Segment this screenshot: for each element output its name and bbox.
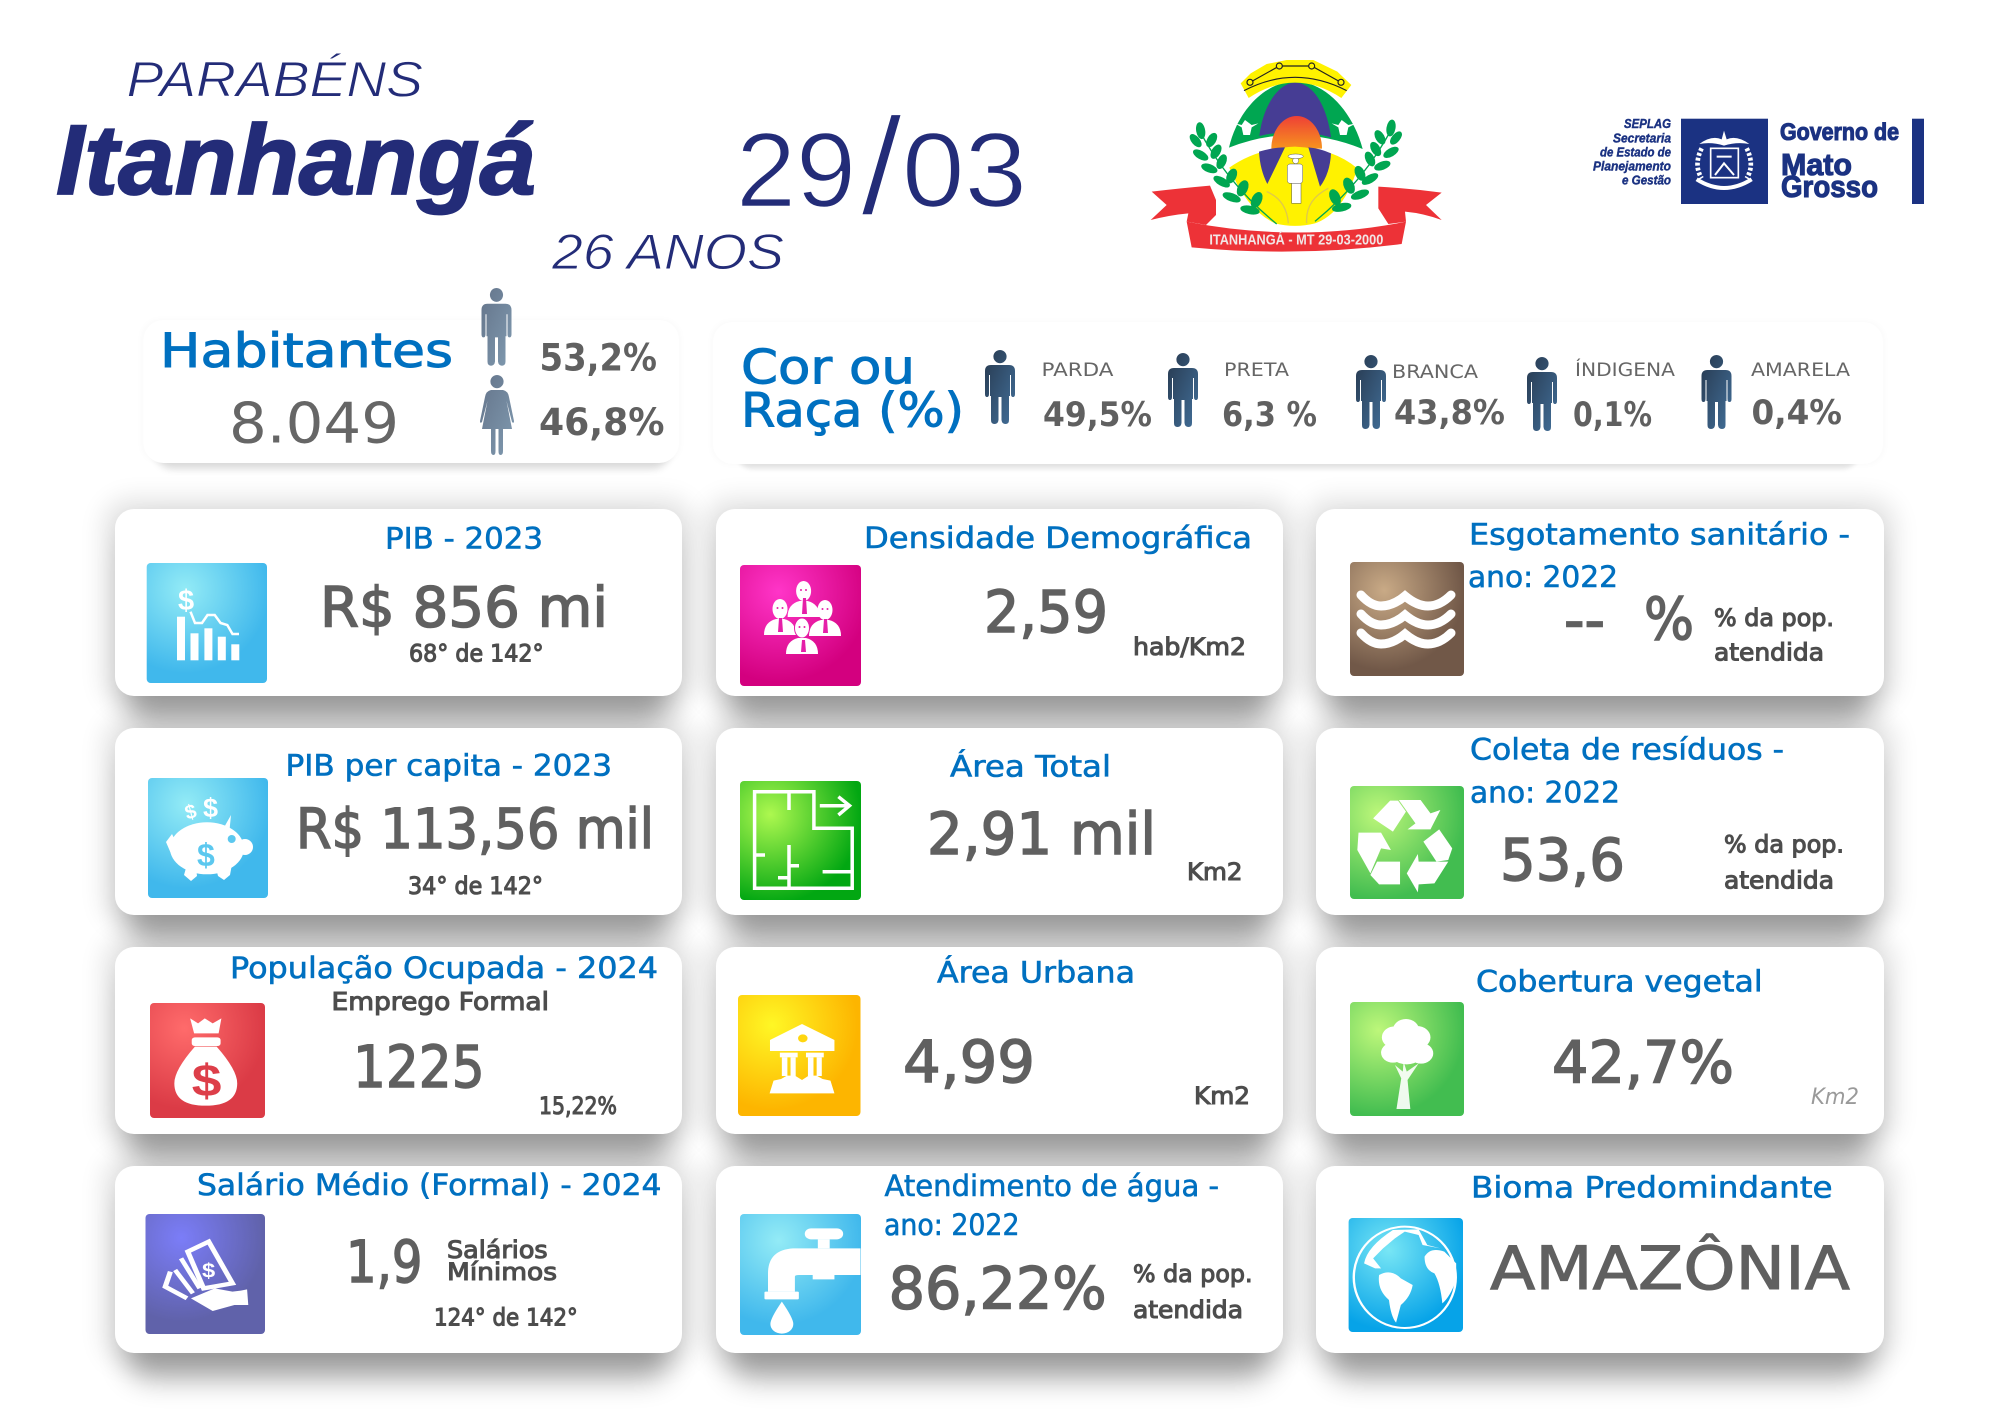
card: Cobertura vegetal xyxy=(1316,947,1884,1134)
item: Amarela xyxy=(1702,355,1850,433)
icon: state crest xyxy=(1681,119,1768,204)
card: Área Total xyxy=(716,728,1283,915)
title: Itanhangá: Itanhangá xyxy=(56,104,536,215)
icon: piggy bank xyxy=(148,778,268,898)
heading: Atendimento de água - xyxy=(884,1169,1219,1203)
item: Preta: 6,3 % xyxy=(1222,395,1317,435)
value: 86,22% xyxy=(889,1254,1107,1322)
heading: Cobertura vegetal xyxy=(1476,964,1763,998)
icon: tree xyxy=(1350,1002,1464,1116)
card: Bioma Predominante xyxy=(1316,1166,1884,1353)
icon: falling bar chart: $ xyxy=(178,585,194,617)
icon: money bag: $ xyxy=(192,1056,221,1106)
text: Grosso: Grosso xyxy=(1781,169,1878,204)
item: Indígena xyxy=(1527,357,1675,435)
panel: Cor ou Raça xyxy=(713,322,1883,464)
card: População Ocupada xyxy=(115,947,682,1134)
heading: População Ocupada - 2024 xyxy=(230,951,658,985)
icon: falling bar chart xyxy=(147,563,267,683)
value: 2,59 xyxy=(984,578,1108,646)
share: 15,22% xyxy=(539,1092,617,1120)
unit: Mínimos xyxy=(447,1258,557,1286)
value: 1,9 xyxy=(346,1228,422,1296)
heading: Área Urbana xyxy=(937,956,1135,990)
icon: floor plan xyxy=(740,781,861,900)
date: 29/03: 03 xyxy=(902,112,1027,230)
logo: municipal coat of arms xyxy=(1151,60,1442,252)
value: R$ 856 mi xyxy=(320,576,608,640)
icon: cash in hand: $ xyxy=(202,1259,215,1282)
icon: piggy bank: $ xyxy=(203,793,218,823)
value: AMAZÔNIA xyxy=(1490,1233,1850,1304)
logo: municipal coat of arms: ITANHANGÁ - MT 29-03-2000 xyxy=(1209,231,1383,248)
heading: PIB per capita - 2023 xyxy=(286,748,612,782)
shadows under panels and cards xyxy=(105,318,1894,1379)
item: Amarela: AMARELA xyxy=(1751,359,1850,381)
icon: man xyxy=(482,288,512,366)
text: Mato: Mato xyxy=(1781,147,1852,182)
item: Indígena: 0,1% xyxy=(1573,395,1652,435)
icon: group of people xyxy=(740,565,861,686)
anniversary: 26 ANOS: 26 ANOS xyxy=(551,224,784,280)
heading: Cor ou Raça: Cor ou xyxy=(741,340,915,395)
item: Indígena: ÍNDIGENA xyxy=(1575,358,1675,381)
text: SEPLAG secretariat: Secretaria xyxy=(1613,132,1671,146)
value: women percent: 46,8% xyxy=(539,401,664,444)
item: Preta xyxy=(1168,353,1317,435)
date: 29/03: / xyxy=(861,90,903,244)
heading: PIB - 2023 xyxy=(385,522,543,556)
icon: civic building xyxy=(738,995,860,1116)
icon: woman xyxy=(480,375,514,455)
item: Preta: PRETA xyxy=(1224,359,1289,381)
value: 1225 xyxy=(353,1033,485,1101)
icon: piggy bank: $ xyxy=(183,800,199,825)
text: SEPLAG secretariat xyxy=(1593,117,1671,188)
unit: Km2 xyxy=(1811,1085,1859,1110)
bar: logo edge xyxy=(1912,119,1924,204)
icon: cash in hand xyxy=(146,1214,265,1334)
item: Amarela: 0,4% xyxy=(1752,393,1842,433)
card: Esgotamento sanitário xyxy=(1316,509,1884,696)
date: 29/03 xyxy=(736,90,1027,244)
heading: Bioma Predomindante xyxy=(1471,1170,1833,1204)
heading xyxy=(884,1169,1219,1242)
heading xyxy=(1468,518,1850,594)
unit xyxy=(1724,831,1844,895)
value: 53,6 xyxy=(1500,826,1625,894)
ranking: 34° de 142° xyxy=(408,872,543,900)
item: Branca: BRANCA xyxy=(1392,361,1478,383)
heading: ano: 2022 xyxy=(1468,560,1618,594)
value: 42,7% xyxy=(1552,1028,1734,1096)
heading: Salário Médio (Formal) - 2024 xyxy=(197,1168,662,1202)
heading: Habitantes: Habitantes xyxy=(160,324,453,379)
card: Atendimento de água xyxy=(716,1166,1283,1353)
date: 29/03: 29 xyxy=(736,112,856,230)
unit: Km2 xyxy=(1187,858,1242,886)
unit: hab/Km2 xyxy=(1133,633,1246,661)
heading: Esgotamento sanitário - xyxy=(1469,518,1850,552)
heading: Densidade Demográfica xyxy=(864,521,1252,555)
value: -- xyxy=(1564,586,1605,654)
item: Branca xyxy=(1356,355,1505,433)
heading: Cor ou Raça: Raça (%) xyxy=(741,384,964,439)
unit: atendida xyxy=(1724,867,1834,895)
unit: % da pop. xyxy=(1714,604,1834,632)
item: Parda: 49,5% xyxy=(1043,395,1152,435)
heading: ano: 2022 xyxy=(884,1208,1020,1242)
heading xyxy=(1470,732,1784,810)
unit: % da pop. xyxy=(1133,1260,1252,1288)
unit xyxy=(447,1236,557,1286)
logo: SEPLAG Governo de Mato Grosso xyxy=(1593,117,1924,204)
text: SEPLAG secretariat: e Gestão xyxy=(1622,174,1671,188)
card: PIB 2023 xyxy=(115,509,682,696)
icon: money bag xyxy=(150,1003,265,1118)
unit xyxy=(1133,1260,1252,1324)
percent sign: % xyxy=(1644,585,1694,653)
ranking: 124° de 142° xyxy=(434,1304,578,1332)
heading: Área Total xyxy=(950,750,1111,784)
value: 2,91 mil xyxy=(927,800,1156,868)
icon: water tap xyxy=(740,1214,861,1335)
value: 4,99 xyxy=(903,1028,1035,1096)
value: population: 8.049 xyxy=(229,392,399,457)
panel: Habitantes xyxy=(144,288,679,463)
ranking: 68° de 142° xyxy=(409,640,544,668)
unit: atendida xyxy=(1714,639,1824,667)
item: Parda: PARDA xyxy=(1042,359,1114,381)
card: Salário Médio xyxy=(115,1166,682,1353)
unit: Km2 xyxy=(1194,1082,1250,1110)
value: R$ 113,56 mil xyxy=(296,797,654,861)
heading: Cor ou Raça xyxy=(741,340,964,439)
item: Parda xyxy=(985,350,1152,435)
icon: recycling arrows xyxy=(1350,786,1464,899)
item: Branca: 43,8% xyxy=(1394,393,1505,433)
card: Coleta de resíduos xyxy=(1316,728,1884,915)
heading: PARABÉNS: PARABÉNS xyxy=(126,52,423,108)
icon: piggy bank: $ xyxy=(197,837,215,873)
text: SEPLAG secretariat: Planejamento xyxy=(1593,160,1671,174)
heading: Coleta de resíduos - xyxy=(1470,732,1784,766)
heading: ano: 2022 xyxy=(1470,776,1620,810)
text: Governo de: Governo de xyxy=(1780,119,1899,146)
unit: atendida xyxy=(1133,1296,1243,1324)
card: Área Urbana xyxy=(716,947,1283,1134)
subheading: Emprego Formal xyxy=(332,987,549,1016)
icon: globe xyxy=(1349,1218,1463,1332)
value: men percent: 53,2% xyxy=(540,337,657,380)
text: SEPLAG secretariat: SEPLAG xyxy=(1624,117,1671,131)
unit: % da pop. xyxy=(1724,831,1844,859)
unit xyxy=(1714,604,1834,667)
unit: Salários xyxy=(447,1236,548,1264)
card: Densidade Demográfica xyxy=(716,509,1283,696)
card: PIB per capita xyxy=(115,728,682,915)
icon: waves xyxy=(1350,562,1464,676)
text: SEPLAG secretariat: de Estado de xyxy=(1600,146,1671,160)
